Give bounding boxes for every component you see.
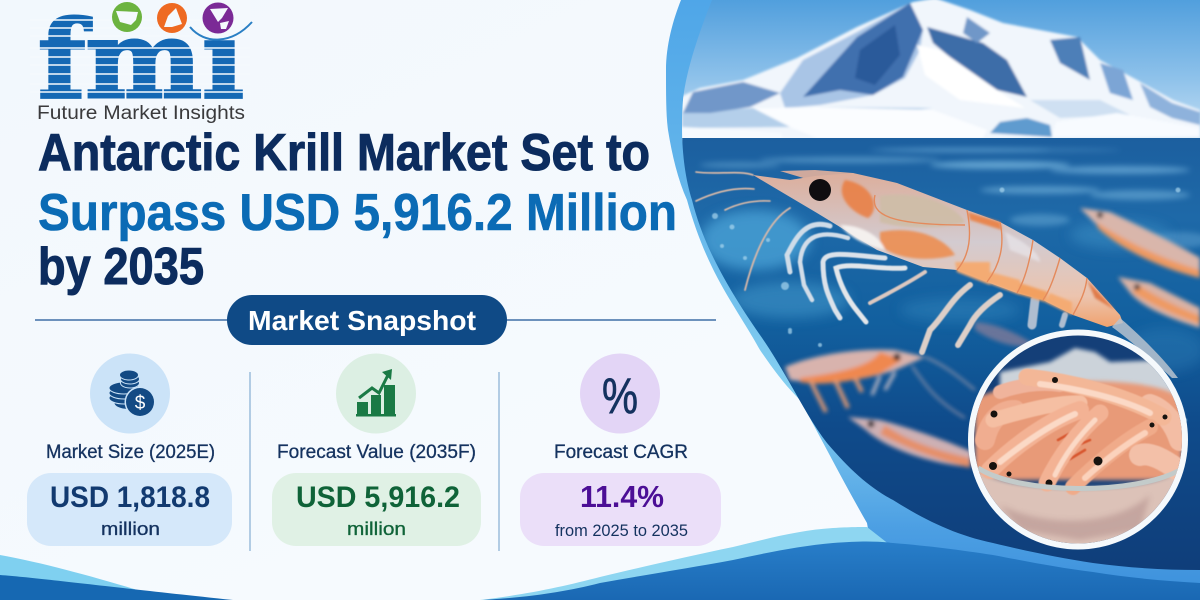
value pill xyxy=(520,473,721,546)
icon: growth chart xyxy=(336,354,416,434)
label: Forecast CAGR xyxy=(554,442,688,463)
icon: percent: % xyxy=(602,368,638,424)
inset photo: krill in bowl xyxy=(968,330,1190,550)
panel: forecast CAGR xyxy=(520,354,721,546)
icon: coins and dollar: $ xyxy=(135,393,146,414)
logo green circle xyxy=(112,2,142,32)
title: by 2035 xyxy=(38,238,204,296)
title xyxy=(38,124,677,296)
krill body xyxy=(753,173,1123,327)
label: Market Size (2025E) xyxy=(46,442,215,463)
market snapshot header: Market Snapshot xyxy=(248,305,476,336)
krill eye xyxy=(809,179,831,201)
logo letters: fmi xyxy=(38,0,244,123)
divider xyxy=(249,372,251,551)
logo orange circle xyxy=(157,3,187,33)
curved light blue band xyxy=(666,0,1200,600)
icon: coins and dollar xyxy=(90,354,170,434)
light wave right xyxy=(480,527,890,600)
sea bokeh xyxy=(712,188,1187,422)
period: from 2025 to 2035 xyxy=(555,521,688,540)
icon: percent xyxy=(580,354,660,434)
light wave left xyxy=(0,555,170,600)
bowl rim xyxy=(978,468,1180,489)
panel: market size xyxy=(27,354,232,546)
logo i-dot mask xyxy=(200,0,250,38)
title: Antarctic Krill Market Set to xyxy=(38,124,650,182)
dark wave left xyxy=(0,575,233,600)
unit: million xyxy=(347,519,406,539)
value: USD 1,818.8 xyxy=(50,481,210,514)
label: Forecast Value (2035F) xyxy=(277,442,476,463)
panel: forecast value xyxy=(272,354,481,546)
divider xyxy=(498,372,500,551)
logo purple circle xyxy=(202,2,234,34)
ice xyxy=(1000,348,1190,400)
bowl krill eyes xyxy=(989,377,1168,486)
dark wave right xyxy=(483,542,1200,600)
main krill xyxy=(696,170,1178,378)
value pill xyxy=(27,473,232,546)
photo: antarctic sea and mountain xyxy=(670,0,1200,578)
logo continents xyxy=(116,8,229,29)
mountain xyxy=(680,0,1200,142)
logo tagline: Future Market Insights xyxy=(37,103,245,124)
sea xyxy=(670,138,1200,578)
value pill xyxy=(272,473,481,546)
value: USD 5,916.2 xyxy=(296,481,460,514)
krill rostrum xyxy=(780,170,854,178)
krill tail xyxy=(1112,318,1178,378)
krill pile xyxy=(975,381,1182,480)
logo stripes xyxy=(30,20,250,92)
bottom waves xyxy=(0,527,1200,600)
krill antennae and legs xyxy=(696,172,1065,352)
krill segments xyxy=(874,195,1087,315)
value: 11.4% xyxy=(580,479,664,514)
market snapshot header xyxy=(35,295,716,345)
title: Surpass USD 5,916.2 Million xyxy=(38,184,677,242)
background krill xyxy=(785,208,1200,468)
sea highlights xyxy=(700,148,1200,248)
krill orange organs xyxy=(840,180,1115,315)
logo arc xyxy=(190,22,252,40)
logo xyxy=(30,0,252,124)
bowl krill xyxy=(985,377,1180,487)
unit: million xyxy=(101,519,160,539)
